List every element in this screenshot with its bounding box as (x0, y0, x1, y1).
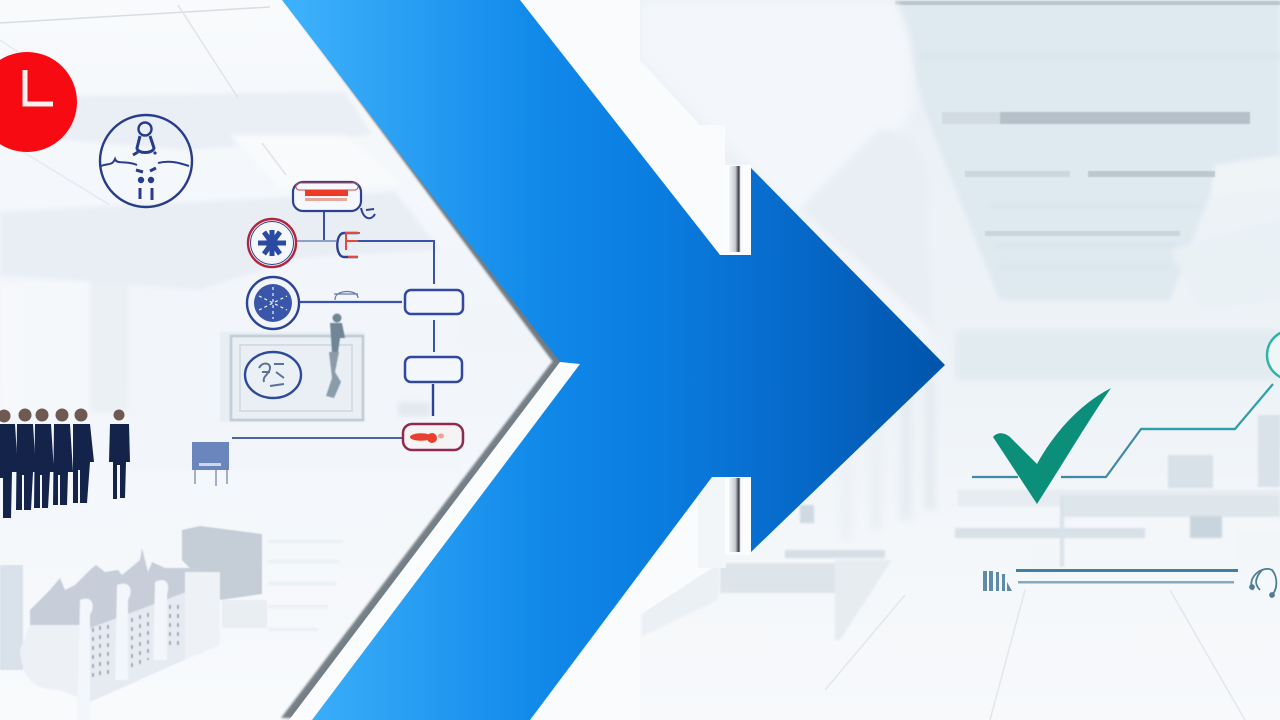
line chart: rising trend (972, 384, 1273, 477)
icon: human figure in circle (100, 115, 192, 207)
footer bar lines (1016, 569, 1238, 572)
floor lines (825, 590, 1245, 720)
flowchart: connectors (232, 212, 434, 438)
crate rack (0, 548, 220, 720)
ceiling (895, 0, 1280, 310)
icon: green check mark (993, 388, 1111, 504)
flowchart: empty node two (405, 357, 462, 382)
white lower chevron band (289, 362, 582, 720)
equipment: background technician (326, 314, 345, 398)
panel: right corridor background (520, 0, 1280, 720)
icon: teal ring (1267, 330, 1280, 380)
vent strips (895, 1, 1280, 236)
flowchart: dark blue network node (247, 277, 299, 329)
equipment: background wall panel (220, 332, 364, 422)
stairs (268, 540, 343, 631)
footer bar icon (983, 571, 1012, 591)
icon: group of people (0, 408, 130, 518)
slot: lower notch (698, 477, 751, 568)
slot: upper notch (695, 125, 751, 257)
large blue arrow (282, 0, 945, 720)
ceiling bands (0, 92, 460, 470)
icon: red clock (0, 52, 77, 152)
flowchart: outlined ellipse node (245, 352, 301, 398)
flowchart: red end node (403, 424, 463, 450)
panel: left office background (0, 0, 558, 720)
equipment: lower machinery (0, 526, 343, 720)
white bands behind arrow (520, 0, 725, 720)
flowchart: process diagram (232, 182, 463, 450)
footer bar: status line (983, 569, 1238, 591)
flowchart: red ring network node (248, 219, 296, 267)
grey cabinet (182, 526, 267, 628)
flowchart: red top node (293, 182, 375, 218)
flowchart: red C node (337, 233, 360, 257)
icon: headset (1250, 569, 1276, 597)
flowchart: empty node one (405, 290, 463, 314)
icon: blue desk (192, 442, 229, 486)
arrow shadow along left notch (281, 0, 565, 718)
